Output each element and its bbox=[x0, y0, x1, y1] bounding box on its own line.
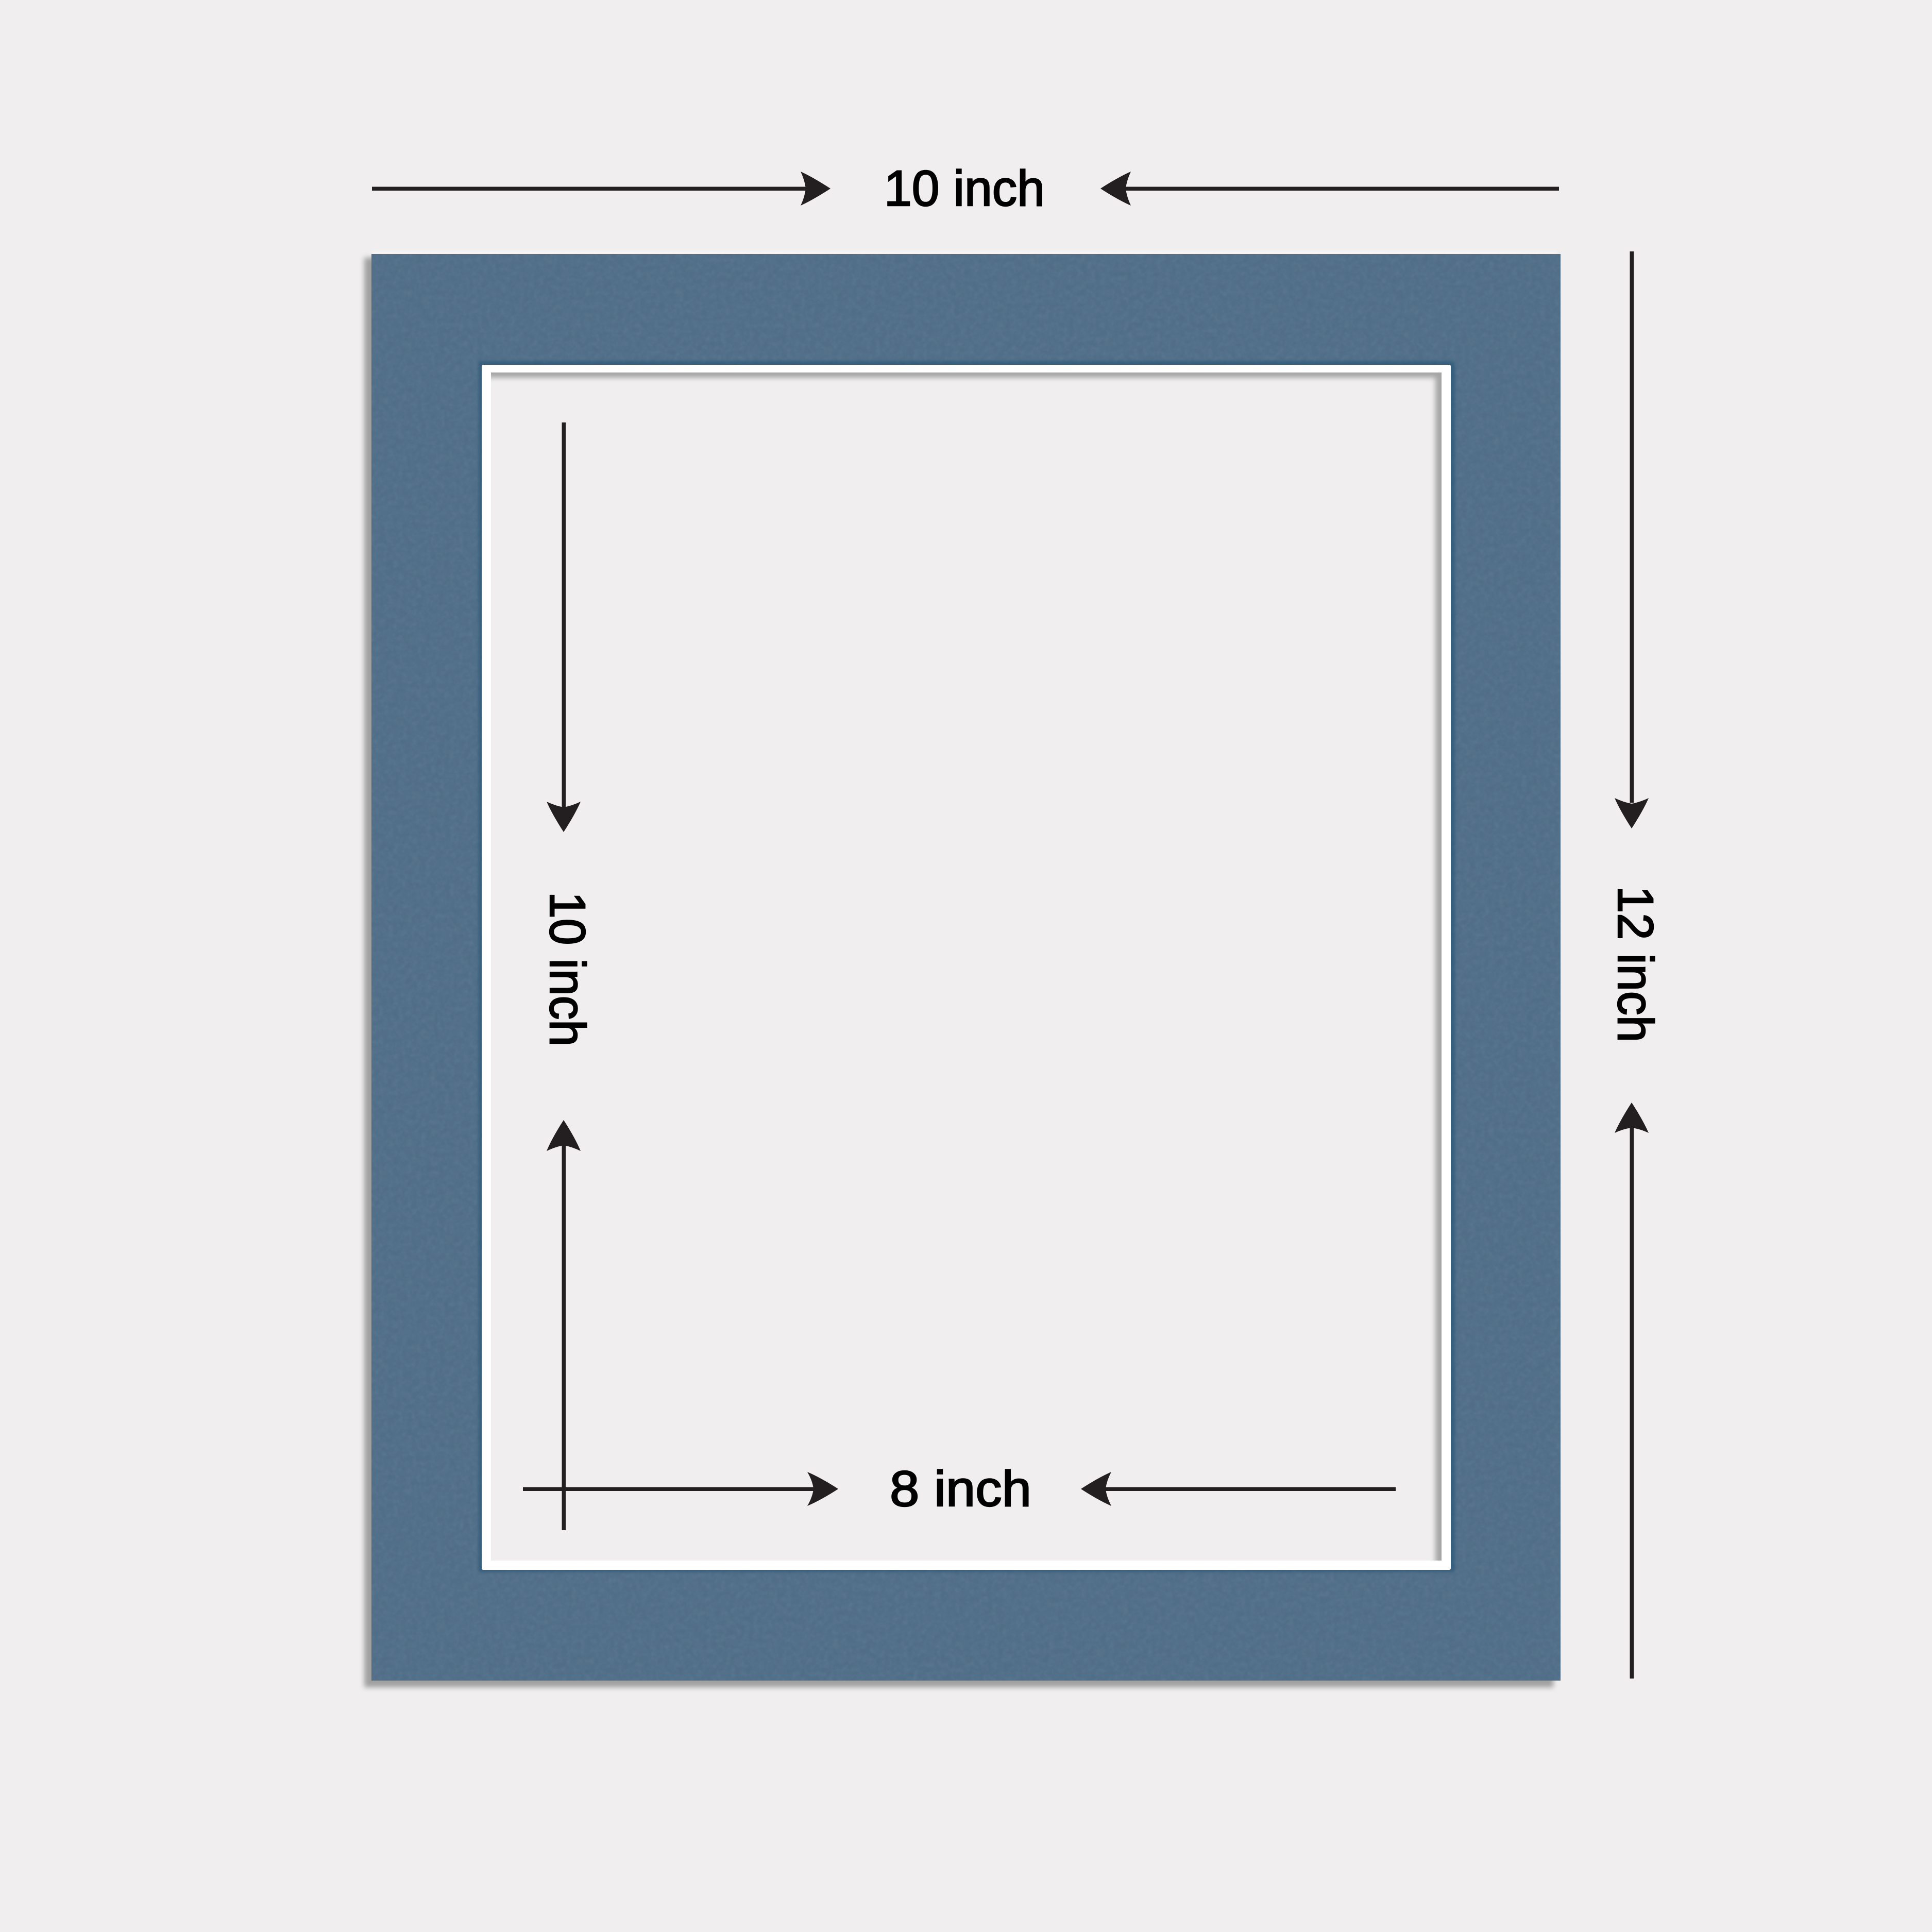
label: 8 inch inner width: 8 inch bbox=[890, 1461, 1031, 1517]
mat surface with paper texture bbox=[371, 254, 1561, 1681]
opening bevel shade bbox=[479, 361, 1455, 1572]
opening interior bbox=[491, 372, 1442, 1561]
arrow: top dimension, right side bbox=[1100, 172, 1559, 206]
white bevel of opening bbox=[482, 365, 1451, 1570]
arrow: inner vertical dimension, bottom side bbox=[547, 1120, 581, 1530]
arrow: inner horizontal dimension, left side bbox=[523, 1472, 838, 1506]
outer drop shadow bbox=[364, 251, 1556, 1687]
arrow: right dimension, top side bbox=[1615, 251, 1649, 828]
arrow: inner vertical dimension, top side bbox=[547, 422, 581, 832]
label: 12 inch height: 12 inch bbox=[1607, 886, 1664, 1042]
arrow: right dimension, bottom side bbox=[1615, 1103, 1649, 1679]
opening inner shadow bbox=[479, 361, 1458, 1577]
panel: mat board bbox=[364, 251, 1561, 1687]
arrow: top dimension, left side bbox=[372, 172, 831, 206]
label: 10 inch width: 10 inch bbox=[884, 160, 1045, 216]
label: 10 inch inner height: 10 inch bbox=[539, 892, 596, 1046]
arrow: inner horizontal dimension, right side bbox=[1081, 1472, 1396, 1506]
